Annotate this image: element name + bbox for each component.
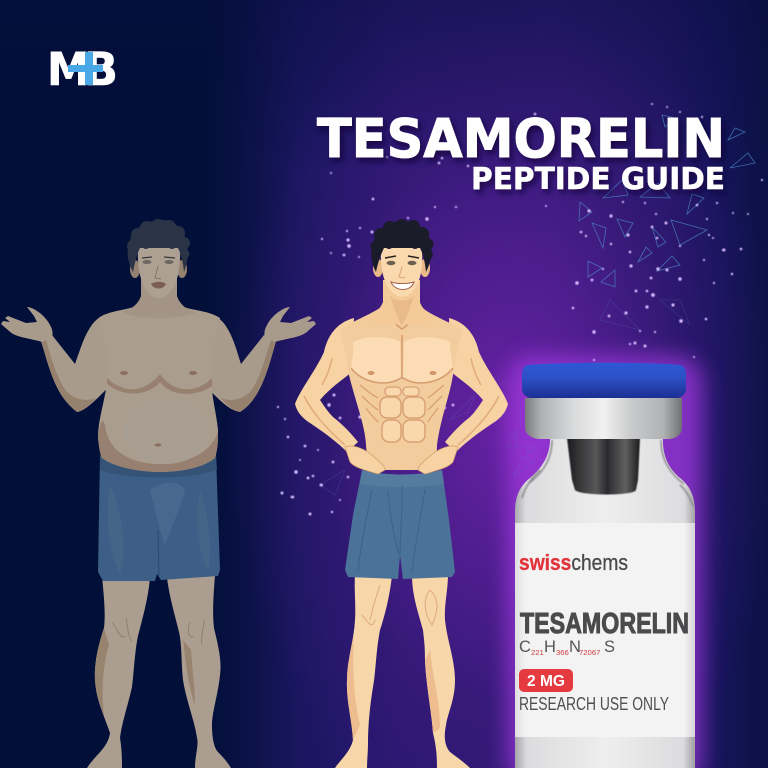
- powder base: [516, 737, 694, 768]
- arms: before: [41, 314, 276, 412]
- vial glow: [507, 356, 703, 768]
- legs: before: [87, 575, 231, 768]
- logo: M: [47, 43, 90, 96]
- dose badge: 2 MG: [527, 673, 565, 690]
- head: after: [364, 219, 440, 326]
- logo: [47, 43, 118, 96]
- chemical formula: N: [569, 638, 581, 656]
- triangle constellation: [320, 115, 755, 495]
- vial: [515, 363, 695, 768]
- figure: after, muscular man: [295, 219, 508, 768]
- rubber stopper: [567, 438, 640, 494]
- chemical formula: C: [519, 638, 531, 656]
- chemical formula: 366: [556, 648, 569, 657]
- chemical formula: S: [604, 638, 615, 656]
- title: TESAMORELIN: [317, 107, 725, 170]
- hands: before: [1, 307, 316, 342]
- subtitle: PEPTIDE GUIDE: [471, 162, 725, 197]
- chemical formula: H: [544, 638, 556, 656]
- hands: after: [345, 446, 458, 474]
- figure: before, overweight man: [1, 219, 316, 768]
- blue cap: [522, 363, 686, 398]
- label: [515, 523, 695, 737]
- star particles: [277, 103, 763, 516]
- glass highlights: [522, 440, 693, 506]
- torso: after: [340, 305, 463, 470]
- head: before: [122, 219, 196, 318]
- chemical formula: 72067: [579, 648, 600, 657]
- chemical formula: 221: [531, 648, 544, 657]
- brand name: swisschems: [519, 550, 628, 575]
- logo: B: [84, 43, 118, 96]
- shorts: after: [345, 470, 455, 579]
- research use only: RESEARCH USE ONLY: [519, 694, 669, 714]
- arms: after: [295, 318, 508, 452]
- product name: TESAMORELIN: [520, 608, 689, 640]
- shorts: before: [98, 455, 220, 581]
- legs: after: [335, 575, 470, 768]
- icon: blue plus: [68, 52, 103, 85]
- torso: before: [98, 305, 220, 472]
- glass body: [515, 436, 695, 768]
- silver crimp: [525, 398, 682, 439]
- dose badge: [519, 669, 573, 692]
